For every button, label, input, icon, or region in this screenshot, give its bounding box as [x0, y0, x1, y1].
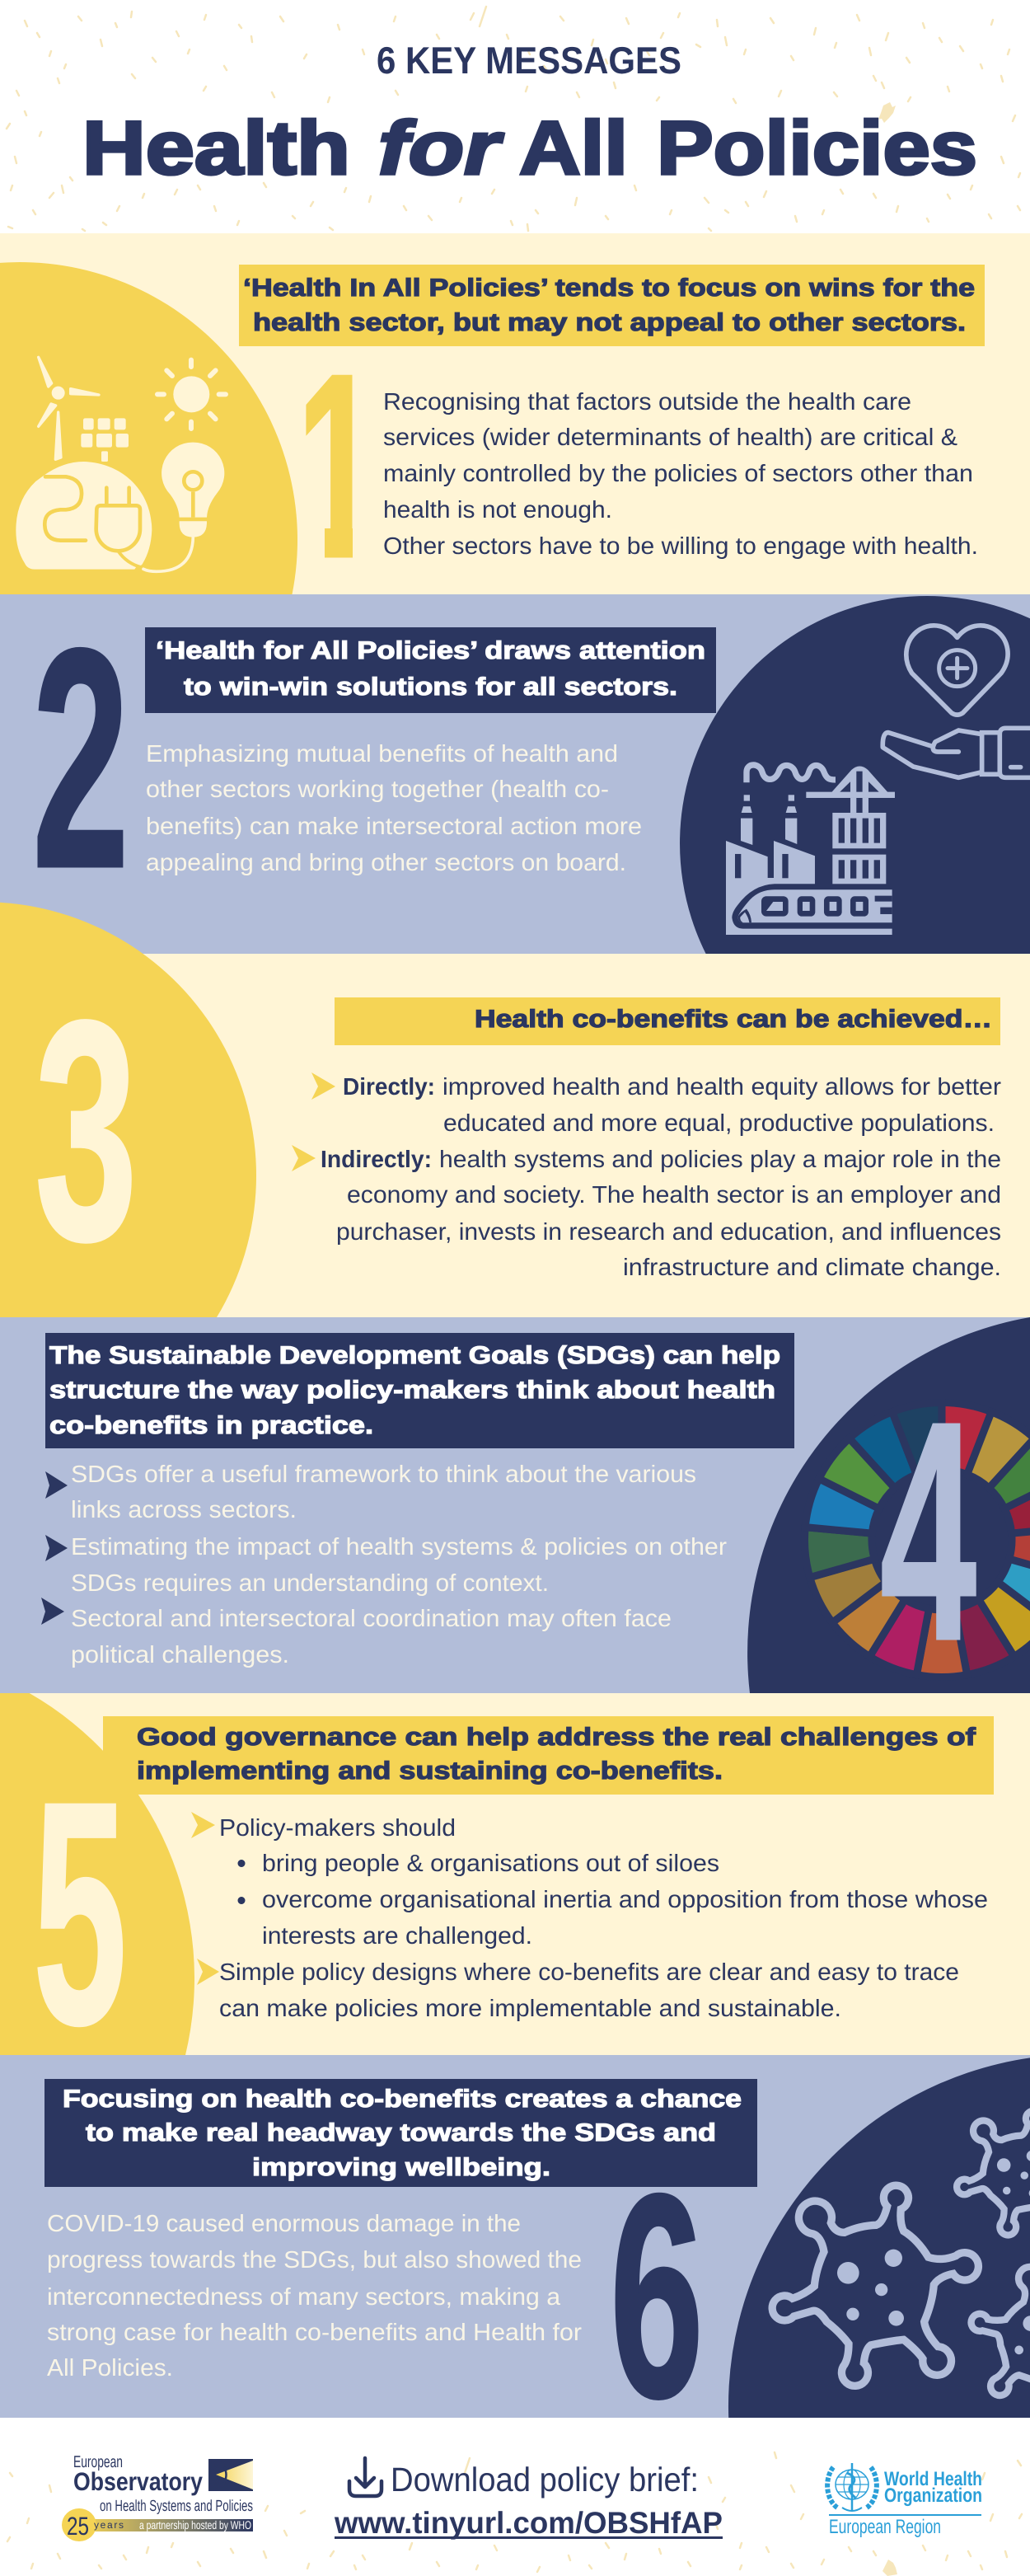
logo: European Observatory: 25: [67, 2512, 89, 2541]
heading banner: improving wellbeing.: [252, 2154, 550, 2181]
body text: Recognising that factors outside the health care: [383, 389, 911, 415]
logo: European Observatory: years: [94, 2519, 124, 2531]
icon: download: [349, 2458, 382, 2496]
number 1: 1: [297, 320, 379, 612]
icon: heart in hand above factory, containers and train: [726, 626, 1030, 935]
text: indirectly: Indirectly:: [321, 1147, 432, 1173]
heading banner: Focusing on health co-benefits creates a chance: [63, 2086, 742, 2113]
icon: upper virus: [957, 2111, 1030, 2236]
icon: viruses: [772, 2111, 1030, 2438]
text: indirectly: economy and society. The health sector is an employer and: [347, 1182, 1001, 1208]
panel: message 3: [0, 903, 1030, 1317]
body text: can make policies more implementable and sustainable.: [219, 1996, 841, 2022]
number 5: 5: [33, 1735, 127, 2090]
yellow circle: [0, 262, 297, 594]
number 6: 6: [610, 2133, 704, 2458]
icon: lower virus: [945, 2244, 1030, 2438]
logo: European Observatory: on Health Systems and Policies: [100, 2498, 253, 2515]
heading banner: structure the way policy-makers think about health: [49, 1377, 775, 1404]
heading banner: [239, 265, 985, 346]
footer speckle texture: [7, 2452, 1022, 2572]
body text: interconnectedness of many sectors, making a: [47, 2284, 561, 2311]
title: for: [378, 106, 503, 190]
text: directly: [343, 1074, 1001, 1137]
download call to action: Download policy brief:: [391, 2461, 699, 2499]
body text: bring people & organisations out of siloes: [262, 1851, 719, 1877]
body text: Simple policy designs where co-benefits are clear and easy to trace: [219, 1959, 959, 1986]
heading banner: implementing and sustaining co-benefits.: [137, 1757, 723, 1785]
heading banner: to make real headway towards the SDGs and: [86, 2119, 716, 2147]
logo: European Observatory: European: [73, 2453, 123, 2471]
heading banner: ‘Health In All Policies’ tends to focus on wins for the: [243, 274, 975, 302]
body text: appealing and bring other sectors on board.: [146, 850, 626, 876]
icon: WHO emblem: [827, 2463, 877, 2511]
logo: European Observatory: a partnership hosted by WHO: [139, 2518, 251, 2531]
text: directly: educated and more equal, productive populations.: [443, 1110, 995, 1137]
body text: Policy-makers should: [219, 1815, 456, 1842]
heading banner: [145, 627, 716, 713]
body text: benefits) can make intersectoral action more: [146, 814, 642, 840]
yellow circle: [0, 903, 256, 1317]
heading banner: to win-win solutions for all sectors.: [184, 673, 677, 701]
body text: interests are challenged.: [262, 1923, 532, 1950]
body text: [146, 741, 642, 876]
footer speckle blot: [883, 2560, 897, 2576]
bullets: [238, 1860, 246, 1904]
text: indirectly: infrastructure and climate change.: [623, 1255, 1001, 1281]
heading banner: [335, 997, 1000, 1045]
heading banner: co-benefits in practice.: [49, 1412, 373, 1439]
panel: message 5: [0, 1693, 1030, 2090]
body text: mainly controlled by the policies of sectors other than: [383, 461, 973, 487]
yellow circle: [0, 1693, 194, 2055]
title: Policies: [657, 106, 977, 190]
body text: [219, 1815, 988, 2022]
icon: main virus: [772, 2185, 978, 2386]
title: Health: [82, 106, 350, 190]
header speckle blot: [878, 102, 896, 123]
text: indirectly: health systems and policies play a major role in the: [439, 1147, 1001, 1173]
body text: SDGs offer a useful framework to think about the various: [71, 1462, 696, 1488]
text: indirectly: purchaser, invests in research and education, and influences: [336, 1219, 1001, 1246]
heading banner: [44, 2079, 757, 2187]
body text: political challenges.: [71, 1642, 289, 1668]
body text: [47, 2211, 582, 2381]
heading banner: The Sustainable Development Goals (SDGs) can help: [49, 1342, 780, 1369]
heading banner: ‘Health for All Policies’ draws attention: [156, 637, 705, 664]
panel: message 2: [0, 584, 1030, 954]
panel: message 6: [0, 2055, 1030, 2458]
body text: All Policies.: [47, 2355, 173, 2381]
logo: European Observatory: [62, 2453, 253, 2541]
body text: Estimating the impact of health systems & policies on other: [71, 1534, 727, 1560]
logo: World Health Organization: Organization: [884, 2485, 982, 2507]
subtitle: 6 KEY MESSAGES: [377, 39, 681, 82]
logo: European Observatory: Observatory: [73, 2467, 204, 2496]
download call to action: www.tinyurl.com/OBSHfAP: [334, 2506, 723, 2540]
body text: services (wider determinants of health) are critical &: [383, 425, 957, 451]
panel: message 1: [0, 233, 1030, 612]
header speckle texture: [7, 7, 1020, 231]
body text: overcome organisational inertia and opposition from those whose: [262, 1887, 988, 1913]
body text: Sectoral and intersectoral coordination may often face: [71, 1606, 672, 1632]
icon: SDG wheel: [796, 1394, 1030, 1684]
body text: strong case for health co-benefits and Health for: [47, 2320, 582, 2346]
body text: progress towards the SDGs, but also showed the: [47, 2247, 582, 2273]
title: All: [519, 106, 628, 190]
text: directly: improved health and health equity allows for better: [442, 1074, 1001, 1100]
body text: COVID-19 caused enormous damage in the: [47, 2211, 521, 2237]
body text: Emphasizing mutual benefits of health and: [146, 741, 618, 767]
logo: World Health Organization: World Health: [884, 2468, 982, 2490]
heading banner: [103, 1716, 994, 1795]
body text: [71, 1462, 727, 1668]
number 2: 2: [32, 584, 129, 933]
heading banner: [45, 1333, 794, 1448]
navy circle: [747, 1317, 1030, 1693]
heading banner: health sector, but may not appeal to other sectors.: [253, 309, 966, 336]
logo: World Health Organization: [827, 2463, 982, 2538]
arrows: [41, 1471, 68, 1625]
title: [82, 106, 977, 190]
heading banner: Health co-benefits can be achieved…: [475, 1006, 992, 1033]
arrow: directly: [311, 1072, 335, 1100]
body text: health is not enough.: [383, 497, 612, 523]
body text: SDGs requires an understanding of context.: [71, 1570, 549, 1597]
text: directly: Directly:: [343, 1074, 435, 1100]
icon: renewable energy, plug and bulb: [16, 357, 226, 571]
arrow: indirectly: [292, 1145, 316, 1171]
body text: links across sectors.: [71, 1497, 297, 1523]
navy circle: [680, 596, 1030, 954]
download call to action: [334, 2461, 723, 2540]
text: indirectly: [321, 1147, 1001, 1281]
heading banner: Good governance can help address the real challenges of: [137, 1724, 976, 1751]
navy circle: [728, 2058, 1030, 2418]
body text: [383, 389, 978, 560]
body text: Other sectors have to be willing to engage with health.: [383, 533, 978, 560]
arrows: [191, 1812, 219, 1985]
panel: message 4: [0, 1317, 1030, 1706]
body text: other sectors working together (health co-: [146, 777, 609, 803]
number 3: 3: [35, 955, 138, 1306]
logo: World Health Organization: European Region: [829, 2516, 941, 2538]
